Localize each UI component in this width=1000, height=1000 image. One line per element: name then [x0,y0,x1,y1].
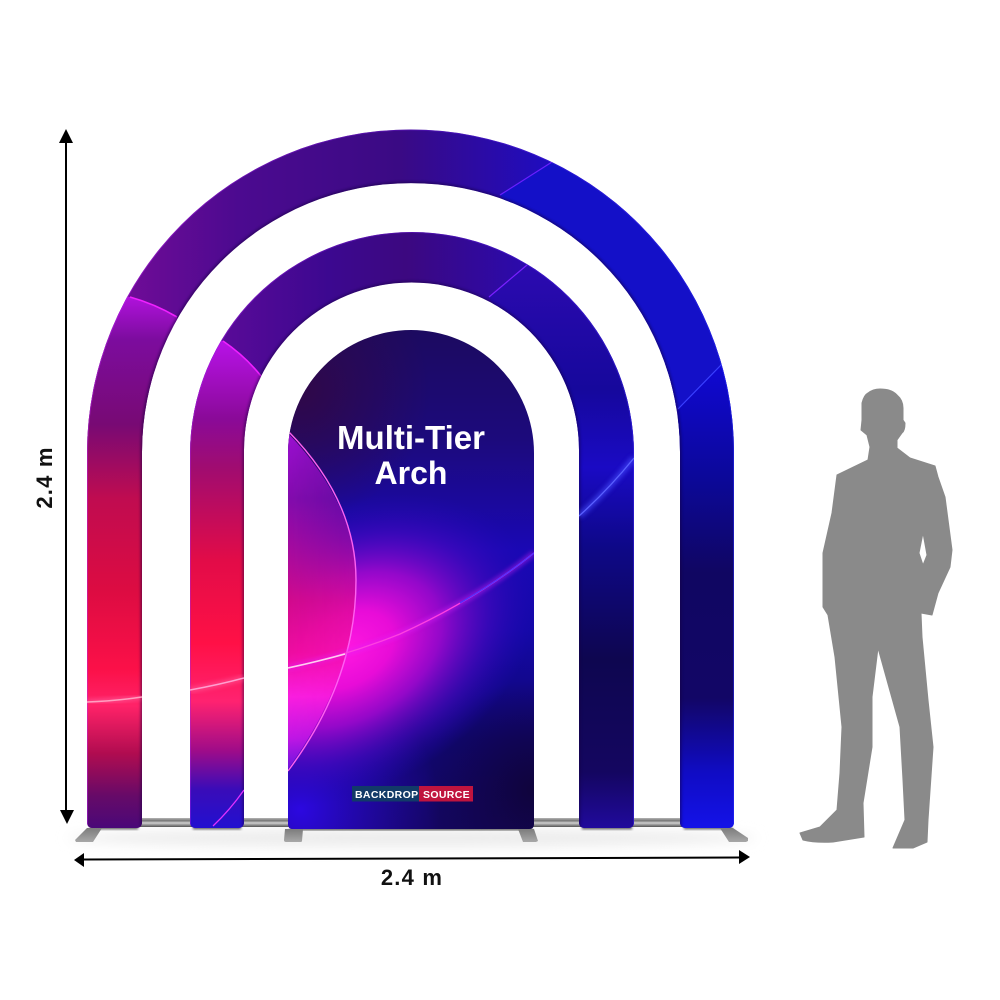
connecting rails [140,818,682,827]
support feet [75,828,748,842]
panel contact shadow [90,827,732,830]
outer arch [87,130,734,828]
bottom-left blue glow [288,740,430,829]
panel title: Multi-Tier [337,419,485,456]
floor shadow [67,829,757,847]
outer arch left lower strip [87,296,177,828]
top-left dark tint [288,331,404,500]
infographic canvas [36,129,952,885]
middle arch rim [190,232,634,828]
outer arch right lower strip [678,364,734,828]
curve lines [288,431,534,771]
middle arch left lower strip [190,340,261,828]
height arrow [59,129,74,824]
width label: 2.4 m [381,865,443,890]
middle arch seams [223,265,527,376]
width arrow [74,850,750,867]
brand logo: SOURCE [423,789,470,801]
panel title [339,425,484,484]
middle arch [190,232,634,828]
centre panel [280,325,534,830]
outer arch rim [87,129,734,828]
outer arch right crown segment [500,162,722,407]
human silhouette [800,389,952,848]
brand logo [352,786,473,802]
middle arch inner shade [244,282,579,828]
middle arch right segment [490,264,634,828]
brand logo: BACKDROP [355,789,418,801]
circular left region [288,434,356,769]
bottom-right dark corner [445,692,534,829]
magenta glow [288,514,516,781]
outer arch inner shade [142,183,680,828]
middle arch sweep lines [190,458,634,826]
outer arch seams [130,162,722,409]
panel title: Arch [375,455,447,491]
outer arch sweep line [87,697,142,702]
height label: 2.4 m [32,446,57,509]
